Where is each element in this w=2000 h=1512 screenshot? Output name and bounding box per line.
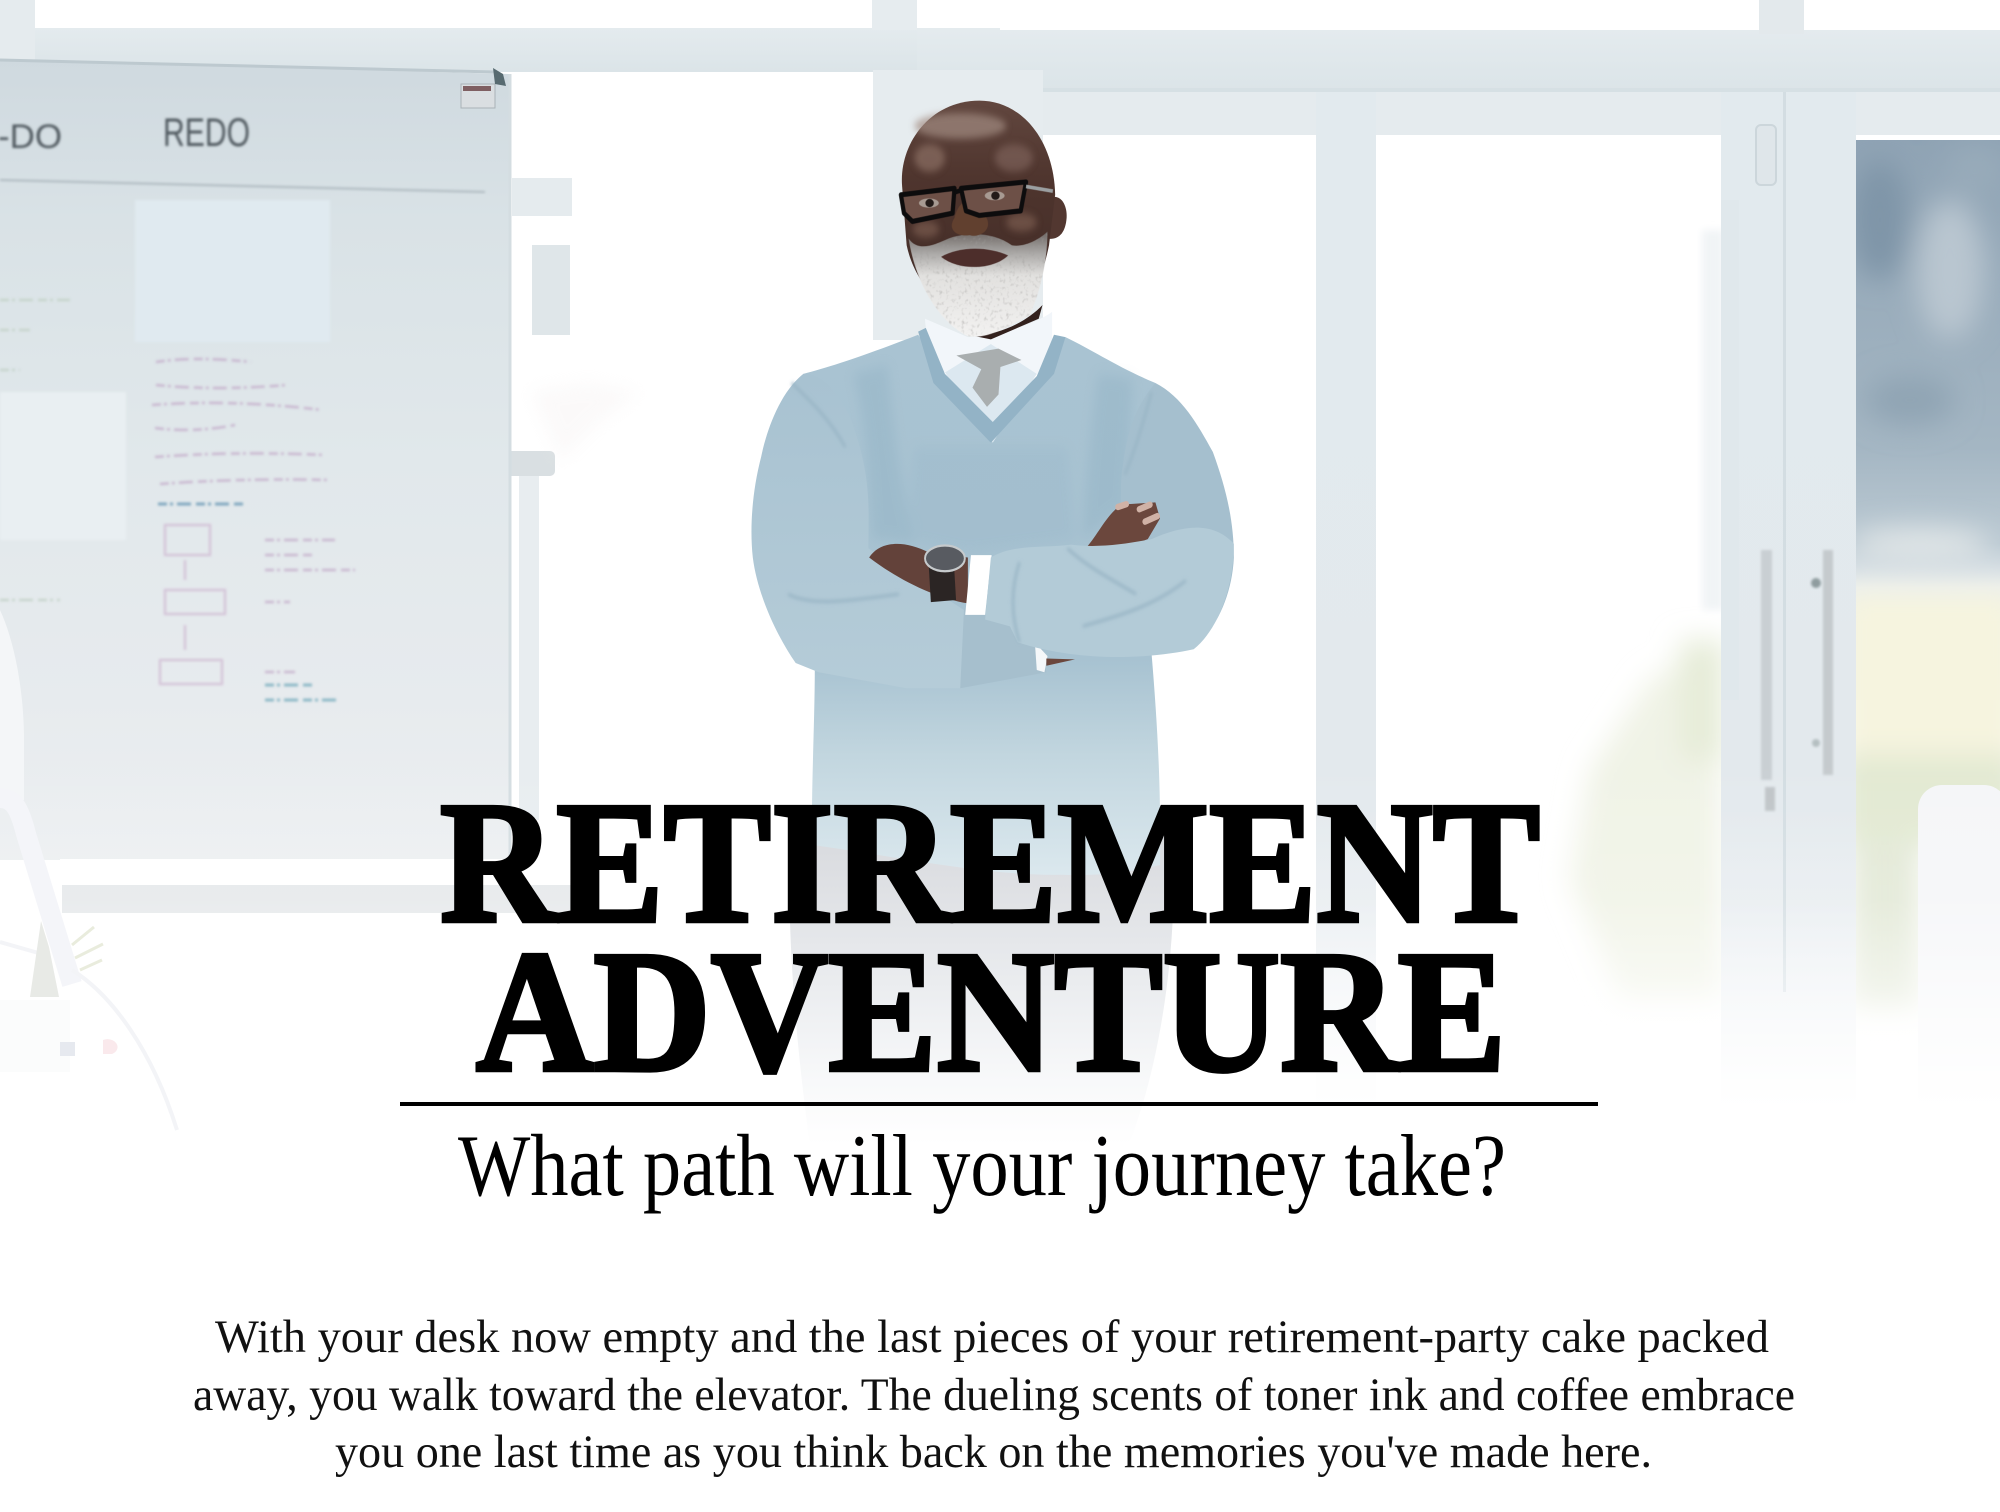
nose [952,200,988,236]
white fade over background [0,760,2000,1110]
sweater shading [853,365,1132,553]
shirt front and tie [945,344,1037,443]
title rule [400,1102,1598,1106]
intro text: With your desk now empty and the last pieces of your retirement-party cake packed [215,1311,1769,1363]
neck [968,305,1043,339]
sleeve folds [788,383,1186,642]
board corner marker [461,68,506,108]
window post right of man [1316,92,1376,1112]
window frame: top band [0,0,2000,135]
wall fragments [512,178,572,335]
left upper arm [751,374,968,688]
photo: man with arms crossed [751,101,1234,1145]
ledge below whiteboard [60,859,582,913]
beard [909,232,1047,337]
title [440,766,1540,1108]
whiteboard stand [505,451,555,820]
shirt collar [925,312,1052,375]
subtitle: What path will your journey take? [458,1118,1506,1215]
window mullion behind man [873,70,1043,340]
intro text: you one last time as you think back on the memories you've made here. [335,1426,1652,1478]
desk lamp and plant bottom left [0,610,177,1130]
door pair with handles [1721,92,1856,1112]
forearm with watch [869,544,968,603]
faint plant behind glass [530,382,640,462]
faint frames beside door [1702,230,1724,610]
ear [1046,197,1067,239]
background photo: office with windows [0,0,2000,1130]
right sleeve forearm [985,528,1234,657]
background greenery [1570,640,1725,1000]
head [902,101,1055,319]
sweater torso [803,335,1160,875]
intro text [193,1311,1795,1478]
glasses [901,182,1053,221]
right upper arm [1121,383,1234,649]
board handwriting [0,300,355,700]
whiteboard [0,60,510,860]
board heading: Redo: REDO [163,111,250,155]
head highlights [912,113,1037,237]
intro text: away, you walk toward the elevator. The dueling scents of toner ink and coffee embrace [193,1369,1795,1421]
left sleeve cuff lower [960,608,1046,688]
title line 1: RETIREMENT [440,766,1540,959]
title line 2: ADVENTURE [476,915,1506,1108]
trousers fading out [789,833,1174,1145]
hand on right arm [1087,502,1160,547]
dark window pane far right [1856,140,2000,1010]
shirt cuff [965,555,992,615]
V-neck ribbing [918,328,1065,443]
